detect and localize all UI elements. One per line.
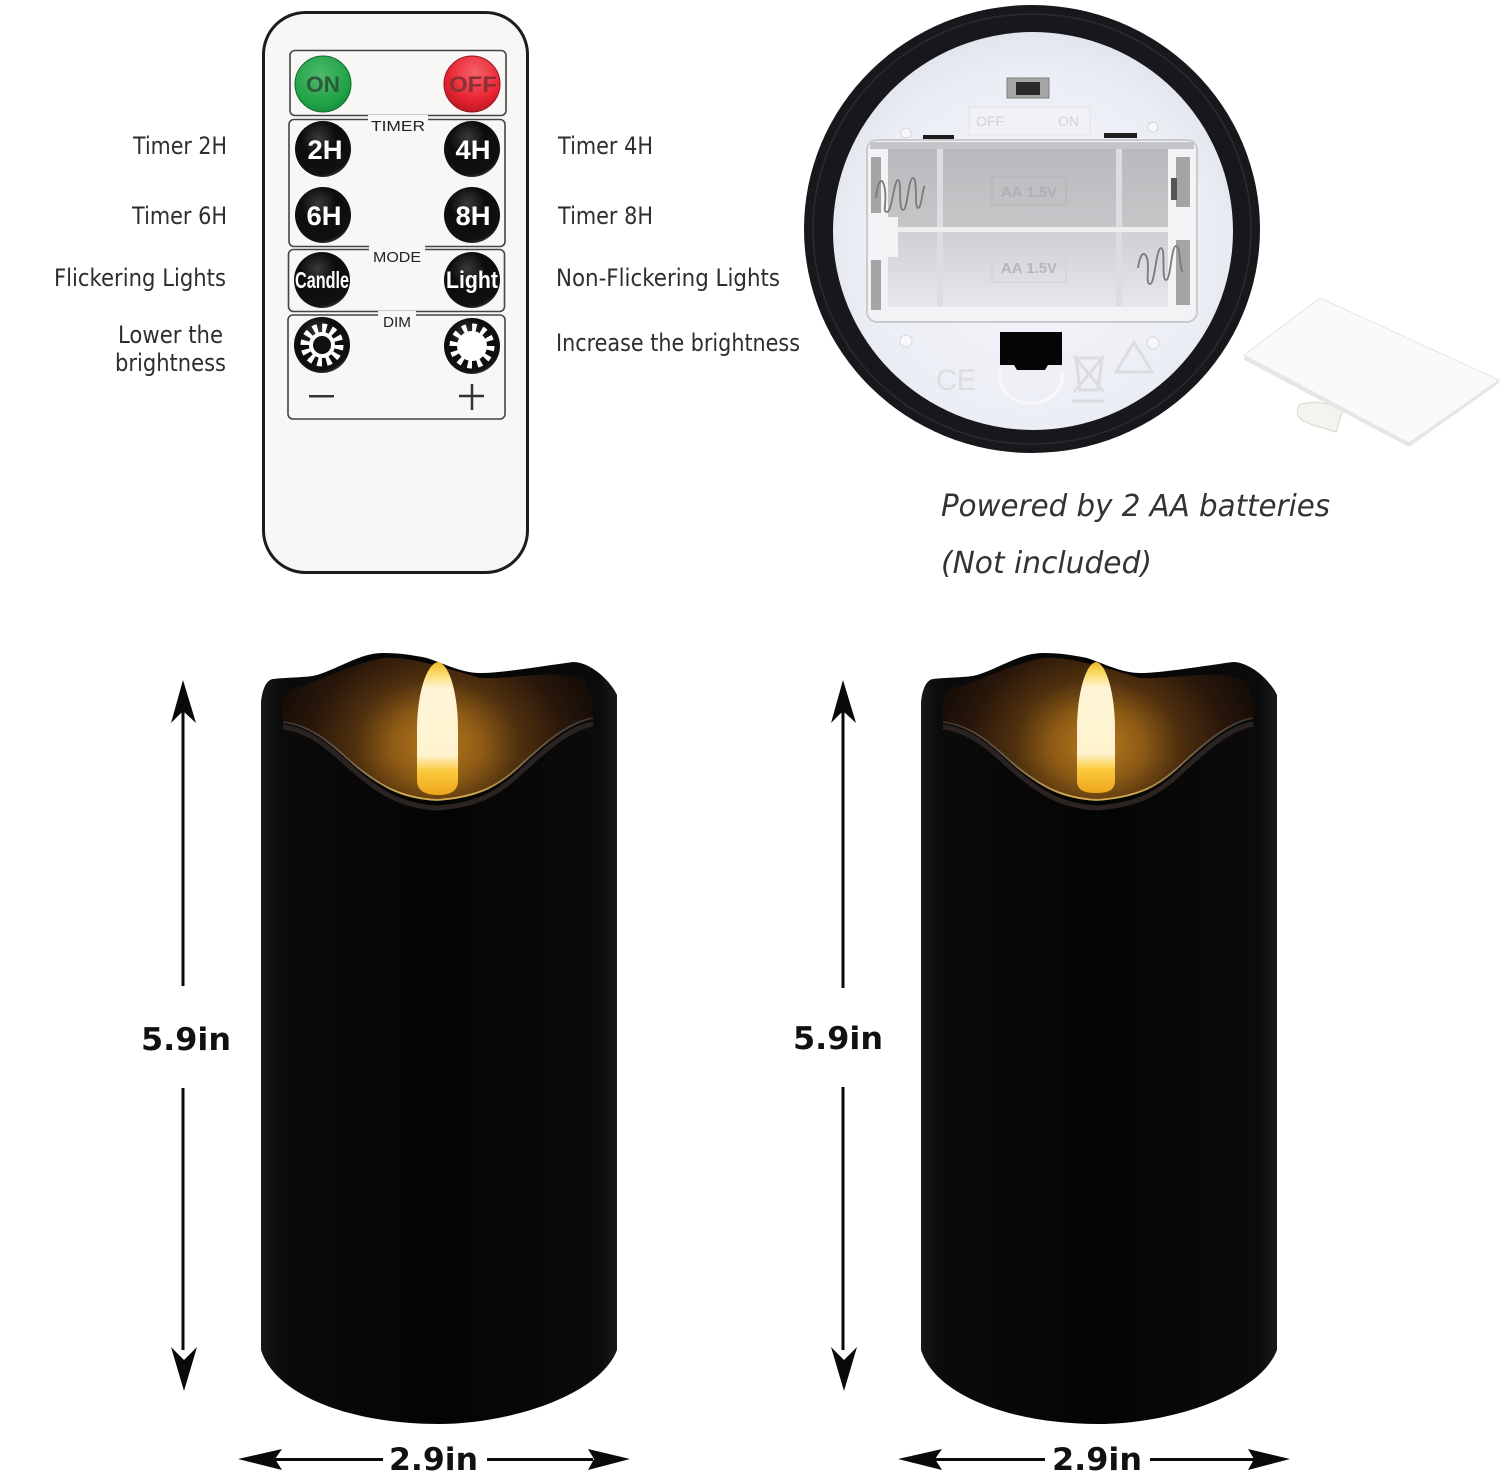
label: flickering lights: Flickering Lights xyxy=(54,264,226,292)
lower battery slot xyxy=(888,232,1168,307)
lip shadow xyxy=(943,724,1253,808)
button: candle: Candle xyxy=(295,267,349,293)
ring grooves xyxy=(813,14,1251,444)
embossed upper label: AA 1.5V xyxy=(1001,184,1057,201)
cover latch slot xyxy=(1000,332,1062,370)
button: off xyxy=(444,56,500,112)
button: 8H: 8H xyxy=(456,201,490,231)
section: timer: TIMER xyxy=(371,118,425,135)
label: timer 2H: Timer 2H xyxy=(132,132,227,160)
height label: left: 5.9in xyxy=(141,1022,231,1058)
remote body xyxy=(264,12,528,572)
label: lower the brightness xyxy=(115,321,226,377)
right spring xyxy=(1138,246,1183,284)
left spring xyxy=(876,178,925,212)
top wall xyxy=(870,142,1194,149)
button: on xyxy=(295,56,351,112)
battery cover xyxy=(1244,298,1499,447)
divider xyxy=(880,227,1185,232)
rubber ring xyxy=(804,5,1260,453)
lip shadow xyxy=(283,724,593,808)
label: timer 6H: Timer 6H xyxy=(131,202,227,230)
label: increase the brightness: Increase the brightness xyxy=(556,329,800,357)
battery note: (Not included) xyxy=(941,546,1152,581)
minus sign xyxy=(309,395,334,398)
embossed off on label: OFF xyxy=(976,113,1004,129)
flame xyxy=(1077,662,1115,793)
white base xyxy=(833,32,1233,430)
battery note: Powered by 2 AA batteries xyxy=(941,489,1330,524)
flame xyxy=(417,662,458,795)
width arrow: right xyxy=(898,1449,1290,1470)
button: dim up xyxy=(444,318,500,374)
label: non-flickering lights: Non-Flickering Lights xyxy=(556,264,780,292)
latch recess xyxy=(1000,370,1062,403)
button: off: OFF xyxy=(449,72,497,97)
embossed upper label xyxy=(992,177,1066,205)
embossed off on label xyxy=(969,107,1090,135)
melted wax cup xyxy=(942,658,1253,800)
section: mode: MODE xyxy=(373,249,421,266)
plus sign xyxy=(459,384,484,410)
lit rim highlight xyxy=(943,718,1253,800)
button: on: ON xyxy=(306,72,340,97)
button: 6H xyxy=(295,187,351,243)
height label: right: 5.9in xyxy=(793,1021,883,1057)
upper battery slot xyxy=(888,148,1168,228)
section: timer xyxy=(289,115,505,246)
height arrow: left xyxy=(171,680,197,1391)
lit rim highlight xyxy=(283,718,593,800)
contact tab xyxy=(1171,178,1177,200)
candle: left xyxy=(261,653,617,1424)
label: timer 4H: Timer 4H xyxy=(557,132,653,160)
button: candle xyxy=(294,252,350,308)
button: 8H xyxy=(444,187,500,243)
label: lower the brightness: brightness xyxy=(115,349,226,377)
button: 4H xyxy=(444,121,500,177)
label: timer 8H: Timer 8H xyxy=(557,202,653,230)
candle body xyxy=(261,653,617,1424)
button: 2H xyxy=(295,121,351,177)
button: light: Light xyxy=(446,267,498,294)
battery note xyxy=(941,489,1330,581)
right block xyxy=(1168,207,1193,233)
section: dim xyxy=(288,311,505,419)
button: dim down xyxy=(294,317,350,373)
section: power xyxy=(290,50,506,116)
button: light xyxy=(444,252,500,308)
panel: candle base with battery compartment xyxy=(804,5,1260,453)
embossed lower label xyxy=(992,252,1066,282)
battery bay xyxy=(867,140,1197,322)
embossed CE mark: CE xyxy=(936,364,976,397)
button: 2H: 2H xyxy=(308,135,342,165)
embossed off on label: ON xyxy=(1058,113,1079,129)
left block xyxy=(876,217,898,257)
button: 6H: 6H xyxy=(306,201,342,231)
candle body xyxy=(921,653,1277,1424)
height arrow: right xyxy=(831,680,857,1391)
power switch xyxy=(1007,78,1049,98)
button: 4H: 4H xyxy=(456,135,490,165)
melted wax cup xyxy=(282,658,593,800)
label: lower the brightness: Lower the xyxy=(118,321,223,349)
embossed lower label: AA 1.5V xyxy=(1001,260,1057,277)
section: dim: DIM xyxy=(383,314,411,331)
metal contacts xyxy=(871,157,1190,310)
panel: remote control xyxy=(264,12,528,572)
slot ribs xyxy=(940,148,1119,306)
embossed recycling marks xyxy=(1072,342,1152,401)
mounting pegs xyxy=(900,122,1159,349)
candle: right xyxy=(921,653,1277,1424)
section: mode xyxy=(288,245,504,312)
width arrow: left xyxy=(238,1449,630,1470)
cover latches xyxy=(923,133,1137,140)
